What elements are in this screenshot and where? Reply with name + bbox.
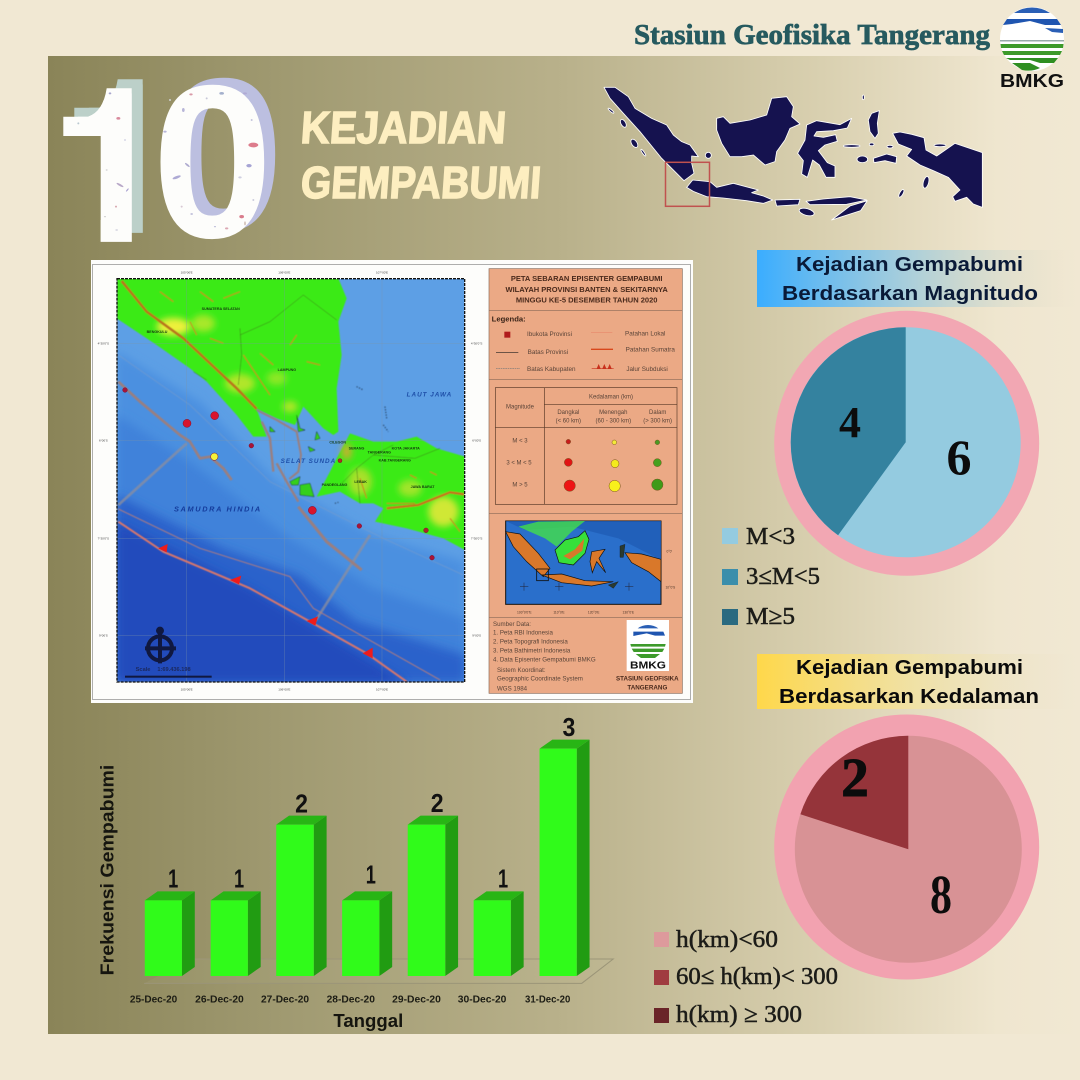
map scale: 1:69.436.198 [157, 667, 191, 673]
legend: magnitude [722, 524, 820, 630]
coordinate labels: 9°00'S [472, 634, 481, 638]
x axis date labels: 27-Dec-20 [261, 995, 309, 1006]
heading: magnitude pie: Berdasarkan Magnitudo [782, 283, 1038, 305]
map frame [117, 279, 465, 682]
coordinate labels [98, 271, 482, 691]
y axis title: Frekuensi Gempabumi [97, 765, 118, 975]
coordinate labels: 6°00'S [99, 439, 108, 443]
land: Sumatra and Java [117, 278, 465, 550]
legend symbols: Batas Provinsi [528, 349, 568, 356]
legend title: MINGGU KE-5 DESEMBER TAHUN 2020 [516, 296, 657, 305]
map: Indonesia silhouette [604, 87, 982, 220]
number shadow: 1: 1 [73, 37, 193, 279]
image frame [91, 260, 693, 703]
inset map of Indonesia: 0°0' [666, 550, 673, 554]
legend BMKG logo [627, 620, 669, 672]
heading: depth pie [757, 654, 1075, 709]
bar 28-Dec-20: 1 [366, 860, 376, 890]
legend: depth: 60≤ h(km)< 300 [676, 964, 838, 990]
place labels: KAB.TANGERANG [379, 459, 411, 463]
magnitude and depth table: M > 5 [512, 483, 528, 489]
icon: BMKG logo: BMKG [1000, 70, 1064, 91]
coordinate labels: 7°30'0"S [471, 536, 482, 540]
bar 27-Dec-20 [276, 789, 327, 976]
place labels: LEBAK [354, 480, 367, 484]
heading line 2: GEMPABUMI [299, 157, 543, 208]
map: epicenter topography: SELAT SUNDA [281, 458, 336, 465]
x axis date labels [130, 995, 571, 1006]
magnitude and depth table: Kedalaman (km) [589, 395, 633, 401]
chart floor [144, 959, 613, 983]
data sources [493, 621, 596, 692]
magnitude and depth table: M < 3 [512, 439, 528, 445]
coordinate labels: 105°00'E [181, 271, 193, 275]
heading: depth pie: Berdasarkan Kedalaman [779, 686, 1039, 708]
place labels: PANDEGLANG [322, 483, 348, 487]
bar 31-Dec-20: 3 [563, 712, 575, 742]
bar 26-Dec-20: 1 [234, 864, 244, 894]
bar 31-Dec-20 [540, 712, 590, 976]
number shadow: 0: 0 [163, 34, 284, 277]
terrazzo speckles on digits [77, 92, 258, 231]
bar 26-Dec-20 [211, 864, 261, 976]
bar chart: earthquake frequency per date [97, 712, 613, 1031]
magnitude and depth table [495, 388, 677, 504]
pie chart: magnitude [774, 311, 1039, 576]
legend: magnitude: 3≤M<5 [746, 564, 820, 590]
coordinate labels: 105°00'E [181, 687, 193, 691]
legend: depth [654, 927, 838, 1028]
data sources: Sistem Koordinat: [497, 667, 546, 674]
pie value: 8: 8 [930, 864, 952, 925]
legend symbols [492, 314, 675, 373]
heading: magnitude pie: Kejadian Gempabumi [796, 254, 1023, 276]
inset map of Indonesia [506, 521, 676, 614]
x axis date labels: 31-Dec-20 [525, 995, 571, 1006]
magnitude and depth table: (< 60 km) [556, 419, 581, 425]
map: epicenter topography: SAMUDRA HINDIA [174, 505, 262, 514]
compass rose [145, 629, 176, 663]
header: station name: Stasiun Geofisika Tangerang [634, 19, 990, 51]
legend: depth: h(km) ≥ 300 [676, 1002, 802, 1028]
data sources: 2. Peta Topografi Indonesia [493, 639, 568, 646]
legend BMKG logo: BMKG [630, 661, 666, 672]
coordinate labels: 7°30'0"S [98, 536, 109, 540]
place labels: SUMATERA SELATAN [202, 307, 240, 311]
magnitude and depth table: (> 300 km) [643, 419, 672, 425]
map scale [125, 667, 212, 678]
bar 30-Dec-20 [474, 864, 524, 976]
x axis date labels: 30-Dec-20 [458, 995, 507, 1006]
magnitude and depth table: Dangkal [557, 410, 579, 416]
legend symbols: Legenda: [492, 314, 526, 323]
big number: 10 [63, 78, 276, 242]
pie chart: depth [774, 714, 1039, 980]
sea depth layers [117, 278, 465, 682]
legend title: PETA SEBARAN EPISENTER GEMPABUMI [511, 274, 662, 283]
coordinate labels: 9°00'S [99, 634, 108, 638]
heading: depth pie: Kejadian Gempabumi [796, 657, 1023, 679]
data sources: 1. Peta RBI Indonesia [493, 629, 553, 636]
map scale: Scale [136, 667, 150, 673]
legend station name [616, 675, 679, 691]
data sources: 4. Data Episenter Gempabumi BMKG [493, 656, 596, 663]
data sources: 3. Peta Bathimetri Indonesia [493, 647, 571, 654]
x axis date labels: 29-Dec-20 [392, 995, 441, 1006]
map: epicenter topography [98, 271, 482, 691]
legend station name: TANGERANG [627, 684, 667, 691]
coordinate labels: 6°00'S [472, 439, 481, 443]
map legend panel [489, 269, 682, 693]
x axis date labels: 28-Dec-20 [327, 995, 375, 1006]
place labels: BENGKULU [147, 330, 168, 334]
legend title [505, 274, 668, 305]
place labels: CILEGON [329, 441, 346, 445]
map: epicenter topography: LAUT JAWA [407, 392, 452, 399]
x axis date labels: 26-Dec-20 [195, 995, 244, 1006]
number shadow: 1 [74, 79, 143, 233]
coordinate labels: 4°30'0"S [98, 341, 109, 345]
place labels: JAWA BARAT [411, 485, 435, 489]
number: 0: 0 [152, 41, 273, 284]
icon: BMKG logo [1000, 7, 1064, 91]
magnitude and depth table: (60 - 300 km) [596, 419, 631, 425]
legend symbols: Patahan Sumatra [626, 347, 675, 354]
legend: depth: h(km)<60 [676, 927, 778, 953]
inset map of Indonesia: 120°0'E [588, 610, 600, 614]
heading: magnitude pie [757, 250, 1075, 307]
bar 29-Dec-20 [408, 788, 458, 976]
magnitude and depth table: Dalam [649, 410, 666, 416]
inset map of Indonesia: 10°0'S [665, 585, 676, 589]
place labels: SERANG [349, 447, 364, 451]
magnitude and depth table: Menengah [599, 410, 627, 416]
place labels [147, 307, 435, 489]
coordinate labels: 107°00'E [376, 271, 388, 275]
heading: Kejadian Gempabumi [299, 102, 543, 208]
magnitude and depth table: Magnitude [506, 404, 535, 410]
number: 1: 1 [62, 46, 182, 288]
legend symbols: Patahan Lokal [625, 330, 665, 337]
bar 25-Dec-20: 1 [168, 864, 178, 894]
bar 27-Dec-20: 2 [295, 789, 308, 819]
bar 29-Dec-20: 2 [431, 788, 444, 818]
epicenter markers [123, 388, 434, 560]
legend: magnitude: M≥5 [746, 604, 795, 630]
inset map of Indonesia: 110°0'E [553, 610, 565, 614]
coordinate labels: 4°30'0"S [471, 341, 482, 345]
legend symbols: Jalur Subduksi [626, 366, 668, 373]
legend: magnitude: M<3 [746, 524, 795, 550]
pie value: 6: 6 [946, 429, 972, 485]
place labels: TANGERANG [368, 451, 391, 455]
data sources: Sumber Data: [493, 621, 531, 628]
inset map of Indonesia: 100°0'0"E [517, 610, 532, 614]
magnitude and depth table: 3 < M < 5 [506, 461, 532, 467]
place labels: KOTA JAKARTA [392, 447, 420, 451]
coordinate labels: 106°00'E [278, 687, 290, 691]
x axis title: Tanggal [333, 1010, 403, 1031]
panel: epicenter map image [91, 260, 693, 703]
map highlight: Banten region box [666, 162, 710, 206]
data sources: Geographic Coordinate System [497, 676, 583, 683]
bar 25-Dec-20 [145, 864, 195, 976]
pie value: 2: 2 [841, 747, 869, 808]
small islands [270, 415, 320, 497]
legend station name: STASIUN GEOFISIKA [616, 675, 679, 682]
x axis date labels: 25-Dec-20 [130, 995, 178, 1006]
data sources: WGS 1984 [497, 685, 528, 692]
place labels: LAMPUNG [278, 368, 296, 372]
legend title: WILAYAH PROVINSI BANTEN & SEKITARNYA [505, 285, 668, 294]
fault lines [118, 355, 463, 682]
bar 28-Dec-20 [342, 860, 392, 976]
coordinate labels: 107°00'E [376, 687, 388, 691]
coordinate labels: 106°00'E [278, 271, 290, 275]
pie value: 4: 4 [839, 398, 861, 447]
number: 1 [63, 88, 132, 242]
subduction triangles [158, 544, 373, 658]
grid lines [117, 278, 465, 682]
inset map of Indonesia: 130°0'E [623, 610, 635, 614]
legend symbols: Batas Kabupaten [527, 366, 576, 373]
bar 30-Dec-20: 1 [498, 864, 508, 894]
heading line 1: KEJADIAN [299, 102, 508, 153]
legend symbols: Ibukota Provinsi [527, 331, 572, 338]
